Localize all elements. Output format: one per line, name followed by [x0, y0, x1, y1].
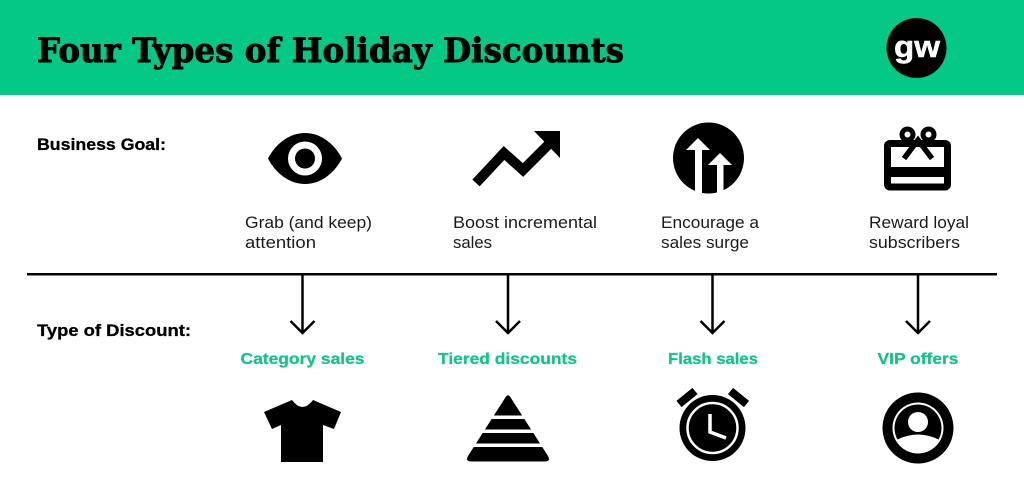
icon: eye [268, 133, 342, 184]
icon: t-shirt [264, 400, 341, 462]
label: vip offers: VIP offers [878, 351, 959, 368]
icon: gift card [884, 129, 951, 190]
goal text: loyal subscribers: Reward loyal [869, 213, 969, 232]
icon: trend arrow [476, 131, 560, 183]
arrow: tiered discounts [496, 275, 520, 333]
logo [886, 18, 946, 78]
goal text: attention: Grab (and keep) [245, 213, 372, 232]
goal text: attention: attention [245, 233, 316, 252]
row label: business goal: Business Goal: [37, 135, 166, 154]
goal text: incremental sales: sales [453, 233, 492, 252]
logo: gw [894, 29, 941, 64]
goal text: loyal subscribers: subscribers [869, 233, 960, 252]
goal text: sales surge: sales surge [661, 233, 749, 252]
arrow: flash sales [700, 275, 724, 333]
arrow: category sales [290, 275, 314, 333]
title: Four Types of Holiday Discounts [37, 31, 624, 71]
row label: type of discount: Type of Discount: [37, 321, 191, 340]
goal text: incremental sales: Boost incremental [453, 213, 597, 232]
icon: alarm clock [679, 391, 746, 461]
label: tiered discounts: Tiered discounts [438, 351, 577, 368]
label: flash sales: Flash sales [668, 351, 758, 368]
arrow: vip offers [906, 275, 930, 333]
label: category sales: Category sales [240, 351, 365, 368]
header band [0, 0, 1024, 95]
icon: tiered pyramid [460, 395, 556, 462]
divider [27, 273, 997, 276]
icon: circle with up arrows [673, 122, 744, 194]
goal text: sales surge: Encourage a [661, 213, 760, 232]
icon: user profile [882, 392, 954, 464]
